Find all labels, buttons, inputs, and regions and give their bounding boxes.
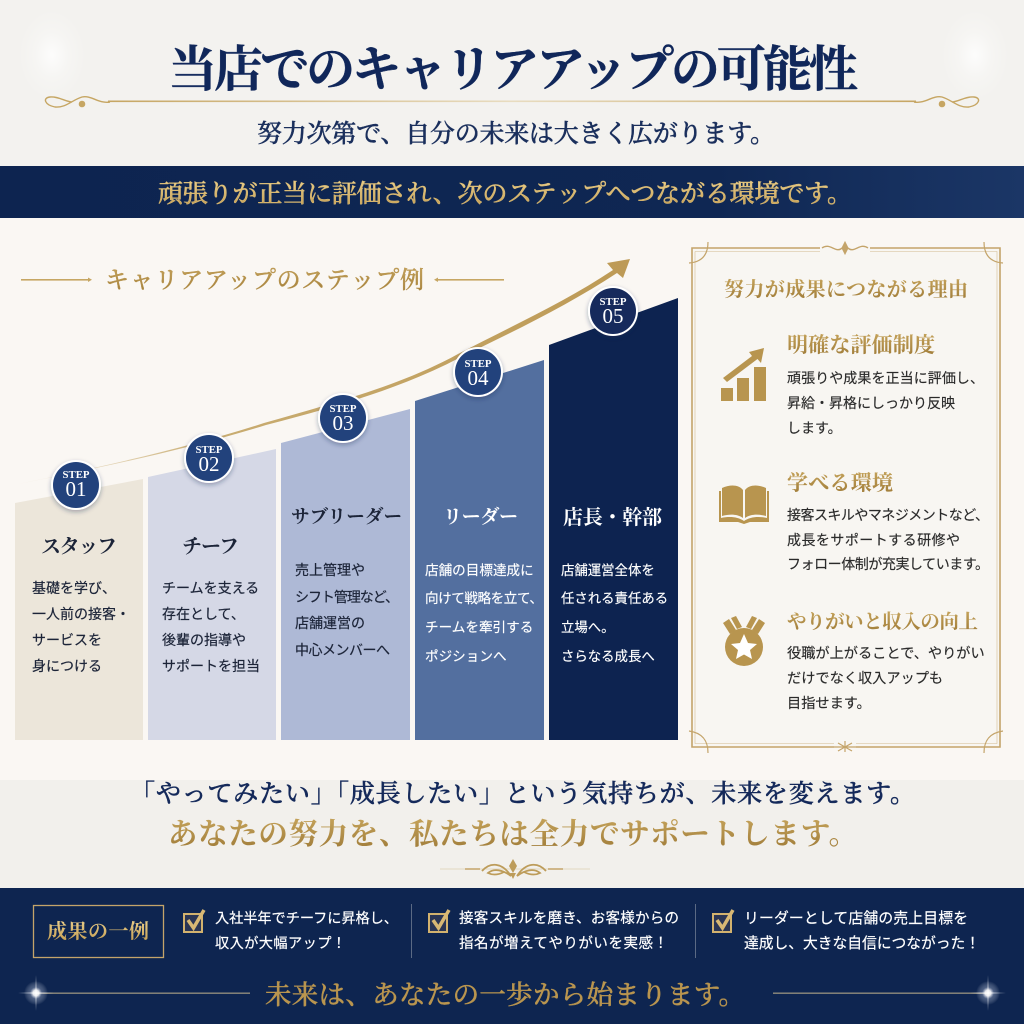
bar: step 1 <box>15 479 143 740</box>
icon: check <box>713 910 733 932</box>
closing highlight: あなたの努力を、私たちは全力でサポートします。 <box>168 818 858 851</box>
reason 1: evaluation <box>721 333 984 436</box>
step badge 2: 02 <box>198 452 220 476</box>
step 3 text: サブリーダー <box>291 507 402 528</box>
step badge 2: STEP <box>196 444 223 456</box>
reason 2: learning <box>719 471 989 572</box>
icon: check <box>184 910 204 932</box>
result 3 <box>713 910 980 952</box>
panel: reasons <box>689 242 1003 753</box>
panel frame <box>689 242 1003 753</box>
step 2 text: 存在として、 <box>162 606 245 622</box>
bar: step 2 <box>148 449 276 740</box>
section heading: career steps <box>21 267 504 294</box>
reason 1: evaluation: 明確な評価制度 <box>787 333 935 357</box>
reason 3: rewards: やりがいと収入の向上 <box>787 611 978 633</box>
step 3 text: シフト管理など、 <box>295 589 399 605</box>
reason 1: evaluation: 昇給・昇格にしっかり反映 <box>787 395 955 411</box>
reason 3: rewards: 役職が上がることで、やりがい <box>787 646 985 662</box>
reason 2: learning: 学べる環境 <box>787 471 893 495</box>
step 5 text: 任される責任ある <box>561 591 668 606</box>
step badge 1: STEP <box>62 469 90 481</box>
subtitle: 努力次第で、自分の未来は大きく広がります。 <box>257 120 775 148</box>
sparkle left <box>18 975 54 1011</box>
step 2 text: 後輩の指導や <box>162 632 246 648</box>
step 4 text <box>425 506 543 664</box>
step badge 1 <box>51 460 101 510</box>
reason 3: rewards: だけでなく収入アップも <box>787 671 943 687</box>
step 2 text: チーフ <box>182 536 239 558</box>
step 5 text: 店長・幹部 <box>563 506 662 529</box>
panel heading: 努力が成果につながる理由 <box>724 278 968 301</box>
result 1: 入社半年でチーフに昇格し、 <box>215 911 398 927</box>
result 2 <box>429 910 679 952</box>
bar: step 5 <box>549 298 678 740</box>
step 1 text: 一人前の接客・ <box>32 606 130 622</box>
ornament <box>440 859 590 879</box>
bar: step 4 <box>415 360 544 740</box>
icon: check <box>429 910 449 932</box>
step 4 text: ポジションへ <box>425 649 507 664</box>
step 1 text: サービスを <box>32 632 102 648</box>
result 2: 指名が増えてやりがいを実感！ <box>459 935 668 952</box>
step badge 3: 03 <box>332 411 354 435</box>
icon: open book <box>719 486 769 524</box>
step 5 text: 店舗運営全体を <box>561 563 655 578</box>
step badge 5: 05 <box>602 304 624 328</box>
step 2 text: チームを支える <box>162 580 259 596</box>
step 5 text <box>561 506 668 664</box>
result 3: 達成し、大きな自信につながった！ <box>744 935 980 952</box>
step 5 text: 立場へ。 <box>561 620 615 635</box>
banner text: 頑張りが正当に評価され、次のステップへつながる環境です。 <box>158 180 852 208</box>
step badge 1: 01 <box>66 477 86 501</box>
results badge <box>34 906 164 958</box>
section heading: career steps: キャリアアップのステップ例 <box>105 267 424 294</box>
step 4 text: チームを牽引する <box>425 620 533 635</box>
step 3 text: 中心メンバーへ <box>295 642 390 658</box>
reason 2: learning: フォロー体制が充実しています。 <box>787 556 989 572</box>
step badge 2 <box>184 433 234 483</box>
result 2: 接客スキルを磨き、お客様からの <box>459 910 679 927</box>
closing message <box>130 780 915 851</box>
step 5 text: さらなる成長へ <box>561 649 655 664</box>
ornamental rule under title <box>45 97 979 107</box>
sparkle right <box>970 975 1006 1011</box>
reason 2: learning: 成長をサポートする研修や <box>787 532 960 548</box>
step 4 text: 向けて戦略を立て、 <box>425 591 543 606</box>
step badge 4: 04 <box>468 366 489 390</box>
step badge 5 <box>588 286 638 336</box>
results badge: 成果の一例 <box>47 919 149 943</box>
reason 3: rewards: 目指せます。 <box>787 696 871 712</box>
step 4 text: リーダー <box>443 506 518 528</box>
step 4 text: 店舗の目標達成に <box>425 563 534 578</box>
reason 3: rewards <box>723 611 985 712</box>
step 2 text <box>162 536 260 674</box>
result 1 <box>184 910 398 952</box>
bar: step 3 <box>281 409 410 740</box>
result 1: 収入が大幅アップ！ <box>215 936 346 952</box>
footer panel <box>0 888 1024 1024</box>
growth arrow <box>18 259 630 484</box>
title: 当店でのキャリアアップの可能性 <box>168 42 858 97</box>
step 2 text: サポートを担当 <box>162 658 260 674</box>
step badge 3 <box>318 393 368 443</box>
step 3 text: 店舗運営の <box>295 615 365 631</box>
closing line: 未来は、あなたの一歩から始まります。 <box>265 980 745 1010</box>
step bars <box>15 298 678 740</box>
step 1 text: 身につける <box>32 658 102 674</box>
step badge 5: STEP <box>600 296 627 308</box>
banner <box>0 166 1024 218</box>
step 3 text: 売上管理や <box>295 562 365 578</box>
step 3 text <box>291 507 402 658</box>
step badge 4 <box>453 347 503 397</box>
step 1 text: 基礎を学び、 <box>32 580 116 596</box>
reason 1: evaluation: します。 <box>787 420 842 436</box>
icon: rising chart <box>721 348 766 401</box>
reason 1: evaluation: 頑張りや成果を正当に評価し、 <box>787 370 984 386</box>
result 3: リーダーとして店舗の売上目標を <box>744 910 968 927</box>
icon: medal <box>723 616 765 666</box>
step badge 3: STEP <box>330 403 357 415</box>
step badge 4: STEP <box>464 358 492 370</box>
step 1 text: スタッフ <box>41 535 117 558</box>
reason 2: learning: 接客スキルやマネジメントなど、 <box>787 507 989 523</box>
step 1 text <box>32 535 130 674</box>
closing message: 「やってみたい」「成長したい」という気持ちが、未来を変えます。 <box>130 780 915 808</box>
